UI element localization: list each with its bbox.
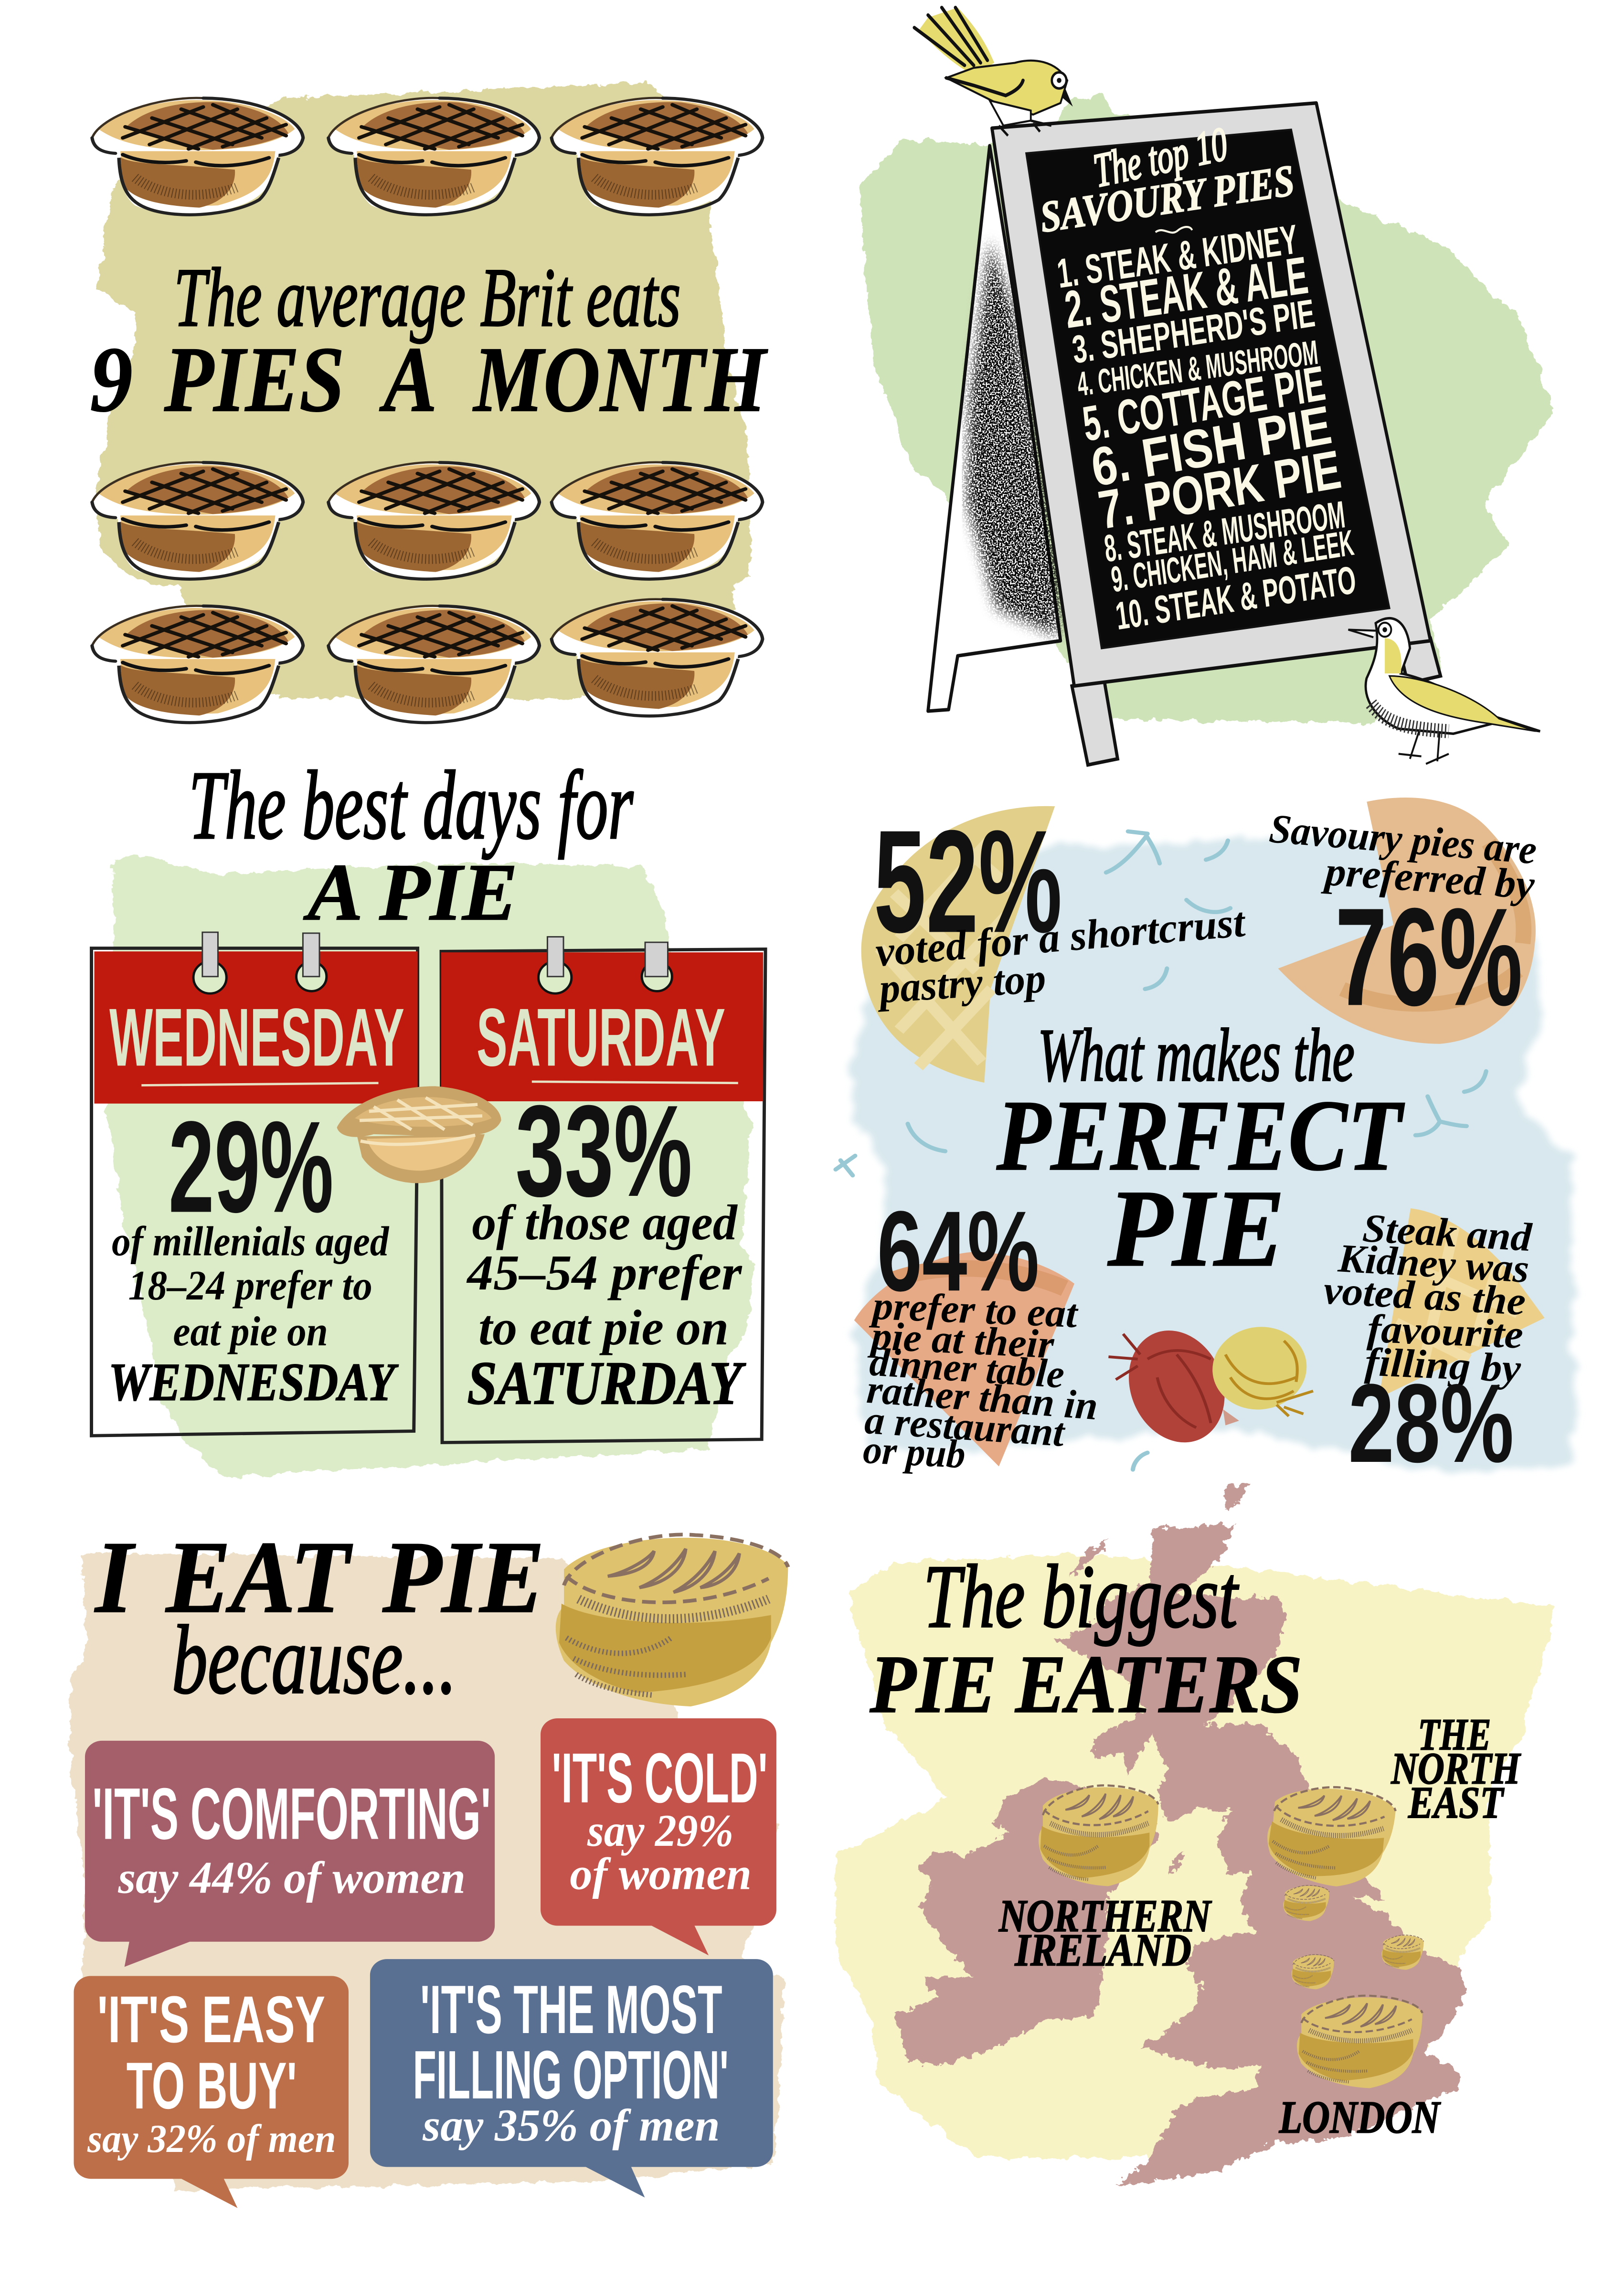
- list of pies: 8. STEAK & MUSHROOM: [1102, 493, 1347, 570]
- stat text: dinner table: rather than in: [865, 1366, 1100, 1428]
- stat text: dinner table: a restaurant: [863, 1397, 1067, 1455]
- icon: bird on the ground: [1348, 618, 1540, 764]
- label: northern ireland: NORTHERN: [998, 1890, 1212, 1941]
- calendar header: wednesday: [94, 951, 418, 1104]
- stat text: dinner table: prefer to eat: [869, 1283, 1080, 1336]
- decorative bird marks: [836, 831, 1486, 1470]
- label: northern ireland: IRELAND: [1015, 1924, 1191, 1975]
- icon: pie, Northern Ireland: [1039, 1785, 1158, 1886]
- pie slice: savoury: [1278, 798, 1536, 1044]
- pies: bottom row: [92, 599, 763, 723]
- stat text: millenials: 18–24 prefer to: [128, 1262, 372, 1309]
- icon: small pie 2: [1381, 1935, 1424, 1970]
- stat: 76%: 76%: [1335, 879, 1523, 1034]
- icon: onions: [1108, 1317, 1316, 1454]
- heading: the average Brit eats: The average Brit eats: [174, 251, 681, 344]
- stat text: millenials: [112, 1218, 389, 1354]
- heading: pie: PIE: [1107, 1167, 1285, 1289]
- stat text: dinner table: [862, 1283, 1100, 1477]
- stat: 29%: 29%: [169, 1094, 334, 1239]
- label: the north east: THE: [1418, 1710, 1491, 1759]
- stat text: dinner table: or pub: [862, 1427, 966, 1477]
- speech bubble: easy to buy: TO BUY': [127, 2049, 297, 2123]
- heading: 9 pies a month: A: [379, 327, 437, 431]
- map: Ireland: [894, 1778, 1157, 2065]
- stat text: those aged: [466, 1195, 743, 1355]
- stat text: steak and kidney: [1322, 1205, 1534, 1391]
- speech bubble: easy to buy: [74, 1976, 349, 2208]
- pie slice: shortcrust: [861, 806, 1055, 1083]
- stat text: millenials: of millenials aged: [112, 1218, 389, 1265]
- underline: [141, 1083, 379, 1085]
- heading: 9 pies a month: MONTH: [472, 327, 768, 431]
- list of pies: 7. PORK PIE: [1095, 439, 1345, 541]
- speech bubble: most filling: FILLING OPTION': [413, 2037, 729, 2113]
- speech bubble: cold: say 29%: [587, 1806, 733, 1856]
- stat text: savoury: [1267, 806, 1539, 908]
- stat text: shortcrust: voted for a shortcrust: [873, 898, 1248, 975]
- heading: pie eaters: PIE EATERS: [870, 1638, 1303, 1730]
- heading: 9 pies a month: PIES: [164, 327, 344, 431]
- stat text: shortcrust: [873, 898, 1248, 1012]
- list of pies: 1. STEAK & KIDNEY: [1055, 216, 1300, 297]
- stat: 64%: 64%: [877, 1188, 1040, 1315]
- background wash: [107, 855, 756, 1477]
- label: the north east: [1390, 1710, 1521, 1828]
- binder rings: [539, 937, 672, 993]
- day label: saturday: SATURDAY: [467, 1349, 746, 1417]
- list of pies: [1055, 216, 1359, 638]
- label: northern ireland: [998, 1890, 1212, 1975]
- stat text: savoury: Savoury pies are: [1267, 806, 1539, 873]
- heading: 9 pies a month: [90, 327, 768, 431]
- panel: 9 pies a month: [90, 83, 768, 723]
- sign: front legs: [1072, 638, 1441, 765]
- stat text: millenials: eat pie on: [173, 1308, 328, 1354]
- heading: the best days for: The best days for: [189, 751, 634, 860]
- pies: middle row: [92, 462, 763, 579]
- sign: back leg: [928, 146, 1061, 711]
- speech bubble: easy to buy: say 32% of men: [87, 2116, 336, 2161]
- pie slice: steak and kidney: [1379, 1208, 1545, 1398]
- speech bubble: cold: [541, 1718, 776, 1955]
- speech bubble: comforting: 'IT'S COMFORTING': [92, 1773, 491, 1854]
- background wash: [836, 1554, 1557, 2158]
- stat text: savoury: preferred by: [1320, 849, 1536, 908]
- underline: [532, 1082, 738, 1083]
- stat text: those aged: 45–54 prefer: [466, 1246, 743, 1301]
- speech bubble: easy to buy: 'IT'S EASY: [97, 1982, 325, 2056]
- label: the north east: NORTH: [1390, 1744, 1521, 1794]
- panel: what makes the perfect pie: [836, 798, 1574, 1486]
- stat text: steak and kidney: filling by: [1364, 1339, 1522, 1391]
- speech bubble: cold: 'IT'S COLD': [552, 1738, 768, 1818]
- sign: blackboard: [1026, 129, 1390, 648]
- day name: wednesday: WEDNESDAY: [109, 992, 404, 1084]
- board heading: savoury pies: SAVOURY PIES: [1038, 156, 1297, 242]
- icon: pie between calendars: [337, 1086, 501, 1183]
- background wash: [860, 96, 1554, 724]
- list of pies: 2. STEAK & ALE: [1061, 245, 1311, 340]
- list of pies: 9. CHICKEN, HAM & LEEK: [1109, 522, 1356, 600]
- heading: perfect: PERFECT: [996, 1079, 1405, 1192]
- stat text: those aged: of those aged: [472, 1195, 738, 1250]
- icon: small pie 1: [1283, 1885, 1329, 1921]
- stat text: dinner table: pie at their: [867, 1313, 1056, 1367]
- swirl ornament: [1156, 227, 1192, 233]
- icon: bird on top of sign: [914, 8, 1073, 136]
- stat text: dinner table: dinner table: [868, 1339, 1066, 1396]
- heading: the biggest: The biggest: [923, 1546, 1239, 1646]
- list of pies: 3. SHEPHERD'S PIE: [1070, 291, 1317, 372]
- stat: 28%: 28%: [1348, 1361, 1514, 1486]
- stat text: steak and kidney: favourite: [1366, 1306, 1524, 1357]
- panel: I eat pie because: [69, 1521, 788, 2208]
- speech bubble: most filling: say 35% of men: [422, 2100, 720, 2151]
- calendar: saturday: [441, 937, 765, 1443]
- panel: the biggest pie eaters: [836, 1483, 1557, 2184]
- speech bubble: most filling: 'IT'S THE MOST: [420, 1971, 722, 2048]
- stat text: those aged: to eat pie on: [478, 1300, 729, 1355]
- speech bubble: comforting: say 44% of women: [117, 1853, 466, 1903]
- pie slice: dinner table: [854, 1252, 1074, 1467]
- background wash: [94, 83, 751, 699]
- heading: because: because...: [172, 1606, 457, 1714]
- pies: top row: [92, 98, 763, 215]
- stat text: steak and kidney: Kidney was: [1337, 1235, 1530, 1291]
- list of pies: 6. FISH PIE: [1087, 394, 1335, 498]
- heading: a pie: A PIE: [303, 848, 518, 937]
- list of pies: 5. COTTAGE PIE: [1079, 355, 1328, 452]
- speech bubble: most filling: [370, 1959, 773, 2197]
- stat text: steak and kidney: Steak and: [1361, 1205, 1534, 1260]
- day name: saturday: SATURDAY: [477, 992, 725, 1084]
- label: london: LONDON: [1279, 2091, 1441, 2142]
- icon: pie, north east: [1263, 1781, 1397, 1891]
- label: the north east: EAST: [1408, 1778, 1505, 1828]
- list of pies: 10. STEAK & POTATO: [1113, 557, 1359, 638]
- stat text: steak and kidney: voted as the: [1322, 1267, 1527, 1324]
- speech bubble: cold: of women: [570, 1849, 752, 1899]
- map: Great Britain: [1055, 1483, 1466, 2184]
- background wash: [850, 838, 1574, 1473]
- panel: top 10 savoury pies: [860, 8, 1554, 765]
- icon: pie, London: [1297, 1996, 1422, 2088]
- panel: best days for a pie: [92, 751, 765, 1477]
- heading: 9 pies a month: 9: [90, 327, 133, 431]
- heading: what makes the: What makes the: [1038, 1014, 1355, 1097]
- stat: 33%: 33%: [515, 1078, 692, 1224]
- heading: I eat pie: I EAT PIE: [94, 1521, 544, 1634]
- calendar: wednesday: [92, 932, 418, 1436]
- sign: frame: [992, 103, 1431, 686]
- icon: large pie: [556, 1534, 788, 1706]
- calendar header: saturday: [441, 952, 763, 1101]
- stat: 52%: 52%: [874, 800, 1062, 963]
- day label: wednesday: WEDNESDAY: [108, 1352, 399, 1412]
- background wash: [69, 1554, 785, 2191]
- binder rings: [193, 932, 327, 993]
- stat text: shortcrust: pastry top: [874, 955, 1047, 1012]
- board heading: the top 10: The top 10: [1090, 117, 1231, 197]
- icon: small pie 3: [1292, 1954, 1334, 1989]
- list of pies: 4. CHICKEN & MUSHROOM: [1075, 333, 1320, 404]
- speech bubble: comforting: [85, 1741, 495, 1967]
